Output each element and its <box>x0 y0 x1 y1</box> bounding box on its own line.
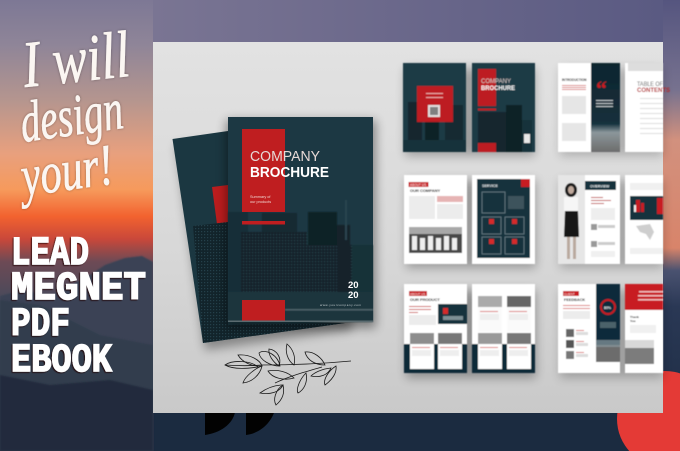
cover subtitle: our products <box>250 200 271 204</box>
block heading: Lead Megnet PDF Ebook: MEGNET <box>11 267 146 312</box>
script heading: I will design your!: your! <box>13 132 117 209</box>
thumbnail: feedback spread shadow <box>560 290 663 378</box>
cover title: COMPANY <box>250 149 320 165</box>
red circle decoration <box>617 371 680 451</box>
thumbnail: about spread shadow <box>406 180 536 268</box>
script heading: I will design your!: design <box>16 76 127 155</box>
thumbnail: client feedback pages <box>558 284 663 373</box>
back brochure <box>172 131 345 343</box>
thumbnail: our product pages: ABOUT US <box>410 292 425 296</box>
back brochure shadow <box>176 128 352 350</box>
cover subtitle <box>250 195 271 204</box>
thumbnail: client feedback pages: Thank <box>630 315 639 319</box>
thumbnail: our product pages <box>404 284 535 373</box>
black quote marks <box>205 405 276 435</box>
script heading: I will design your!: I will <box>18 18 133 102</box>
thumbnail: about company and service <box>404 175 535 264</box>
thumbnail: client feedback pages: You <box>630 319 636 323</box>
thumbnail: overview with portrait: OVERVIEW <box>590 184 610 188</box>
red accent bar <box>242 221 285 224</box>
thumbnail: introduction and contents: TABLE OF <box>637 82 663 88</box>
thumbnail: introduction and contents: “ <box>596 76 607 101</box>
thumbnail: client feedback pages: 80% <box>604 306 612 310</box>
thumbnail: client feedback pages: CLIENT <box>564 292 575 296</box>
script heading: I will design your! <box>13 18 133 209</box>
thumbnail: about company and service: SERVICE <box>482 184 498 188</box>
thumbnail: overview with portrait <box>558 175 663 264</box>
thumbnail: about company and service: OUR COMPANY <box>410 188 440 193</box>
cover subtitle: Summary of <box>250 195 271 199</box>
thumbnail: back and front cover <box>403 63 535 152</box>
cover year: 20 <box>348 280 359 291</box>
cover website: www.yourcompany.com <box>320 303 362 307</box>
thumbnail: client feedback pages: FEEDBACK <box>564 298 585 302</box>
red bottom block <box>242 300 285 321</box>
front brochure shadow <box>226 120 376 328</box>
thumbnail: back and front cover: COMPANY <box>481 79 511 85</box>
gray panel <box>153 42 663 413</box>
block heading: Lead Megnet PDF Ebook: PDF <box>11 303 70 348</box>
thumbnail: introduction and contents <box>558 63 670 152</box>
thumbnail: cover spread shadow <box>405 68 535 156</box>
thumbnail: product spread shadow <box>406 290 536 378</box>
cover year <box>348 280 359 301</box>
block heading: Lead Megnet PDF Ebook: EBOOK <box>11 339 112 384</box>
block heading: Lead Megnet PDF Ebook: LEAD <box>11 232 89 277</box>
main brochure mockup <box>172 117 376 350</box>
thumbnail: introduction and contents: INTRODUCTION <box>562 78 587 82</box>
front brochure cover <box>228 117 373 322</box>
leaf branch illustration <box>225 344 351 405</box>
red title bar <box>242 129 285 212</box>
thumbnail: overview spread shadow <box>560 180 663 268</box>
thumbnail: about company and service: ABOUT US <box>410 183 426 187</box>
block heading: Lead Megnet PDF Ebook <box>11 232 146 384</box>
city skyline <box>228 200 373 322</box>
thumbnail: our product pages: OUR PRODUCT <box>410 297 440 302</box>
cover year: 20 <box>348 290 359 301</box>
thumbnail: introduction spread shadow <box>560 68 663 156</box>
thumbnail: introduction and contents: CONTENTS <box>637 88 670 94</box>
thumbnail: back and front cover: BROCHURE <box>481 86 515 92</box>
cover title bold: BROCHURE <box>250 165 329 181</box>
